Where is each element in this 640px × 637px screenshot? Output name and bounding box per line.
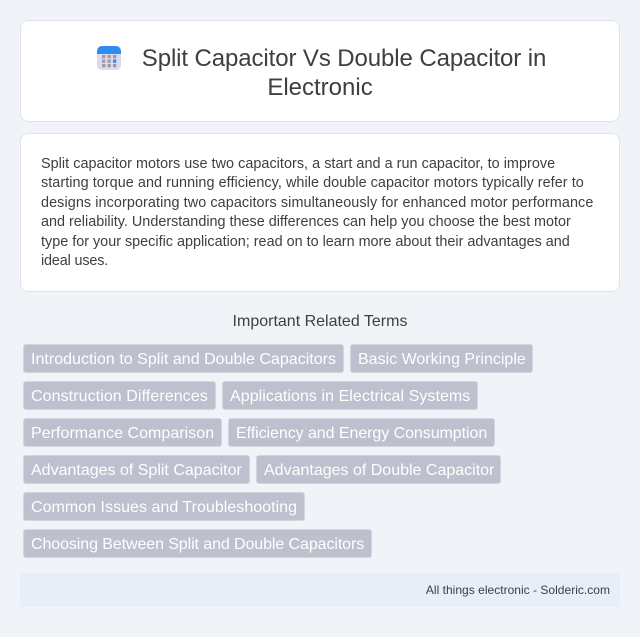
- tag: basic working principle: Basic Working Principle: [358, 351, 526, 368]
- tag: advantages of double: Advantages of Double Capacitor: [264, 462, 494, 479]
- tag: introduction: Introduction to Split and Double Capacitors: [31, 351, 336, 368]
- tag: performance comparison: Performance Comparison: [31, 425, 214, 442]
- tag: introduction: [23, 344, 344, 373]
- summary line 1: Split capacitor motors use two capacitors, a start and a run capacitor, to improve: [41, 156, 555, 172]
- tag: advantages of split: [23, 455, 250, 484]
- tag: common issues: Common Issues and Troubleshooting: [31, 499, 297, 516]
- footer credit: All things electronic - Solderic.com: [426, 583, 610, 597]
- tag: choosing: [23, 529, 372, 558]
- tag: choosing: Choosing Between Split and Double Capacitors: [31, 536, 364, 553]
- tag: advantages of split: Advantages of Split Capacitor: [31, 462, 242, 479]
- tag: common issues: [23, 492, 305, 521]
- tag: construction differences: [23, 381, 216, 410]
- summary line 6: ideal uses.: [41, 253, 108, 269]
- footer bar: [20, 573, 620, 607]
- heading line 2: Electronic: [267, 74, 373, 101]
- summary line 2: starting torque and running efficiency, while double capacitor motors typically refer to: [41, 175, 584, 191]
- panel: summary card: [20, 133, 620, 292]
- icon: calendar: [97, 46, 121, 70]
- tag: advantages of double: [256, 455, 501, 484]
- tag: basic working principle: [350, 344, 533, 373]
- tag: efficiency: [228, 418, 495, 447]
- heading line 1: Split Capacitor Vs Double Capacitor in: [142, 45, 546, 72]
- section heading: related terms: Important Related Terms: [233, 313, 407, 330]
- panel: title card: [20, 20, 620, 122]
- summary line 3: designs incorporating two capacitors simultaneously for enhanced motor performance: [41, 195, 593, 211]
- tag: applications: [222, 381, 478, 410]
- summary line 5: type for your specific application; read on to learn more about their advantages and: [41, 234, 570, 250]
- tag: performance comparison: [23, 418, 222, 447]
- tag: applications: Applications in Electrical Systems: [230, 388, 470, 405]
- tag: efficiency: Efficiency and Energy Consumption: [236, 425, 487, 442]
- summary line 4: and reliability. Understanding these differences can help you choose the best motor: [41, 214, 571, 230]
- tag: construction differences: Construction Differences: [31, 388, 208, 405]
